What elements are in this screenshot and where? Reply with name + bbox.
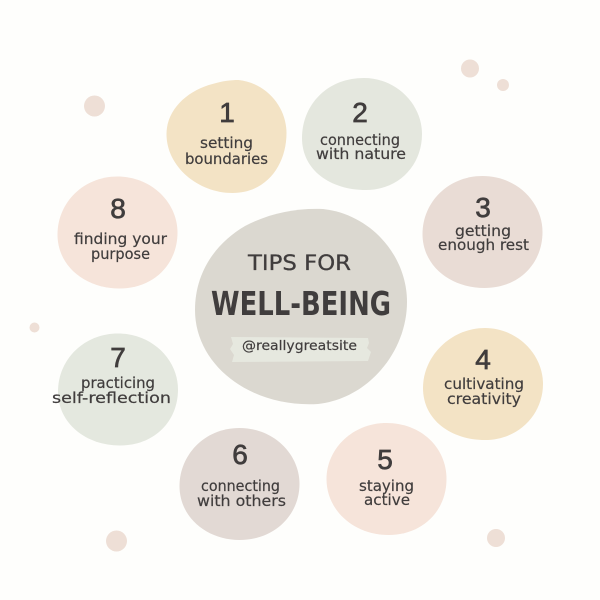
- panel: tip 4: [423, 328, 543, 440]
- label 8: purpose: [91, 245, 150, 263]
- number 4: 4: [475, 344, 491, 375]
- panel: tip 8: [58, 176, 178, 288]
- label 7: self-reflection: [52, 389, 171, 407]
- number 6: 6: [232, 439, 248, 470]
- panel: tip 1: [166, 80, 286, 193]
- label 2: [316, 131, 406, 163]
- panel: tip 7: [52, 334, 178, 446]
- panel: tip 3: [422, 176, 542, 288]
- label 3: enough rest: [438, 236, 529, 254]
- blob 7: [58, 334, 178, 446]
- label 5: active: [364, 491, 410, 509]
- label 6: connecting: [201, 477, 280, 495]
- label 1: [185, 134, 268, 168]
- label 4: [444, 375, 524, 408]
- decorative dots: [30, 60, 509, 552]
- label 5: staying: [359, 477, 414, 495]
- blob 6: [180, 428, 300, 540]
- label 4: cultivating: [444, 375, 524, 393]
- blob 2: [302, 78, 422, 190]
- number 8: 8: [110, 193, 126, 224]
- heading: well-being: WELL-BEING: [211, 284, 391, 323]
- blob 5: [326, 423, 446, 535]
- label 4: creativity: [447, 390, 521, 408]
- panel: tip 6: [180, 428, 300, 540]
- blob 3: [422, 176, 542, 288]
- panel: tip 5: [326, 423, 446, 535]
- label 8: [74, 230, 168, 263]
- number 2: 2: [352, 97, 368, 128]
- label 5: [359, 477, 414, 509]
- panel: center title: [195, 209, 407, 404]
- blob 4: [423, 328, 543, 440]
- number 3: 3: [475, 192, 491, 223]
- label 1: setting: [200, 134, 253, 152]
- blob 1: [166, 80, 286, 193]
- label 1: boundaries: [185, 150, 268, 168]
- center blob: [195, 209, 407, 404]
- label 3: [438, 222, 529, 254]
- label 8: finding your: [74, 230, 168, 248]
- number 1: 1: [219, 97, 235, 128]
- handle strip: [230, 337, 371, 362]
- label 6: with others: [197, 492, 286, 510]
- label 3: getting: [455, 222, 511, 240]
- label 7: practicing: [81, 374, 155, 392]
- label 7: [52, 374, 171, 407]
- number 5: 5: [377, 444, 393, 475]
- blob 8: [58, 176, 178, 288]
- label 2: with nature: [316, 145, 406, 163]
- label 6: [197, 477, 286, 510]
- panel: tip 2: [302, 78, 422, 190]
- heading: tips for: TIPS FOR: [247, 251, 351, 275]
- label 2: connecting: [320, 131, 400, 149]
- number 7: 7: [110, 342, 126, 373]
- handle text: @reallygreatsite: [242, 339, 357, 354]
